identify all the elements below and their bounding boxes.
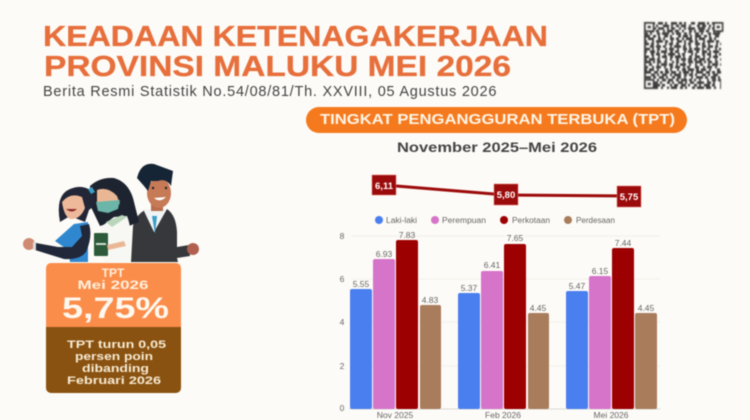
legend: Perempuan xyxy=(442,216,486,225)
figure: man in suit xyxy=(131,164,199,262)
card top: headline value: TPT xyxy=(102,266,125,280)
figure: student girl xyxy=(23,187,95,262)
bars: Feb 2026: 7.65 xyxy=(507,233,524,243)
card top: headline value xyxy=(46,263,181,327)
bars: Nov 2025: 5.55 xyxy=(353,279,370,289)
bars: Mei 2026: 4.45 xyxy=(638,303,655,313)
bars: Feb 2026 xyxy=(458,233,549,409)
bars: Nov 2025: 6.93 xyxy=(376,249,393,259)
bars: Mei 2026 xyxy=(566,238,657,409)
marker: Feb 2026 xyxy=(494,184,518,205)
bar chart: TPT by group xyxy=(340,230,660,420)
x axis labels: Mei 2026 xyxy=(594,410,629,420)
title xyxy=(43,21,548,83)
card bottom: note: Februari 2026 xyxy=(67,375,161,387)
bars: Mei 2026: 7.44 xyxy=(615,238,632,248)
marker: Nov 2025 xyxy=(372,175,396,195)
bars: Feb 2026: 4.45 xyxy=(530,303,547,313)
card bottom: note: persen poin xyxy=(75,351,153,363)
icon: QR code xyxy=(644,23,722,88)
x axis labels: Feb 2026 xyxy=(485,410,521,420)
card bottom: note: TPT turun 0,05 xyxy=(67,339,166,351)
marker: Feb 2026: 5,80 xyxy=(497,190,515,201)
card bottom: note xyxy=(46,327,181,393)
bars: Nov 2025: 7.83 xyxy=(399,230,416,240)
title: PROVINSI MALUKU MEI 2026 xyxy=(44,51,511,83)
bars: Feb 2026: 6.41 xyxy=(484,260,501,270)
marker: Mei 2026 xyxy=(617,186,641,207)
legend: Perkotaan xyxy=(512,216,550,225)
chart subtitle: period: November 2025–Mei 2026 xyxy=(397,140,598,155)
figure: woman with mask xyxy=(90,178,139,262)
panel: TPT headline card xyxy=(46,263,181,393)
bars: Feb 2026: 5.37 xyxy=(461,283,478,293)
marker: Mei 2026: 5,75 xyxy=(620,192,639,203)
bars: Mei 2026: 5.47 xyxy=(569,281,586,291)
card bottom: note: dibanding xyxy=(82,363,149,375)
y axis labels: 0 xyxy=(340,403,345,413)
marker: Nov 2025: 6,11 xyxy=(375,181,394,192)
legend: Laki-laki xyxy=(386,216,417,225)
y axis labels: 2 xyxy=(340,361,345,371)
card top: headline value: Mei 2026 xyxy=(78,278,149,292)
bars: Nov 2025: 4.83 xyxy=(422,295,439,305)
title: KEADAAN KETENAGAKERJAAN xyxy=(43,21,548,53)
y axis labels: 8 xyxy=(340,231,345,241)
y axis labels: 4 xyxy=(340,317,345,327)
legend: Perdesaan xyxy=(576,216,615,225)
heading pill: TPT: TINGKAT PENGANGGURAN TERBUKA (TPT) xyxy=(320,112,675,128)
subtitle: source reference: Berita Resmi Statistik No.54/08/81/Th. XXVIII, 05 Agustus 2026 xyxy=(43,84,497,100)
x axis labels: Nov 2025 xyxy=(377,410,413,420)
line chart: TPT trend xyxy=(372,175,641,207)
heading pill: TPT xyxy=(306,107,687,133)
card top: headline value: 5,75% xyxy=(62,292,169,325)
bars: Mei 2026: 6.15 xyxy=(592,266,609,276)
legend xyxy=(375,216,615,225)
illustration: three workers xyxy=(23,164,199,262)
y axis labels xyxy=(340,231,345,413)
y axis labels: 6 xyxy=(340,274,345,284)
x axis labels xyxy=(377,410,629,420)
bars: Nov 2025 xyxy=(350,230,441,409)
